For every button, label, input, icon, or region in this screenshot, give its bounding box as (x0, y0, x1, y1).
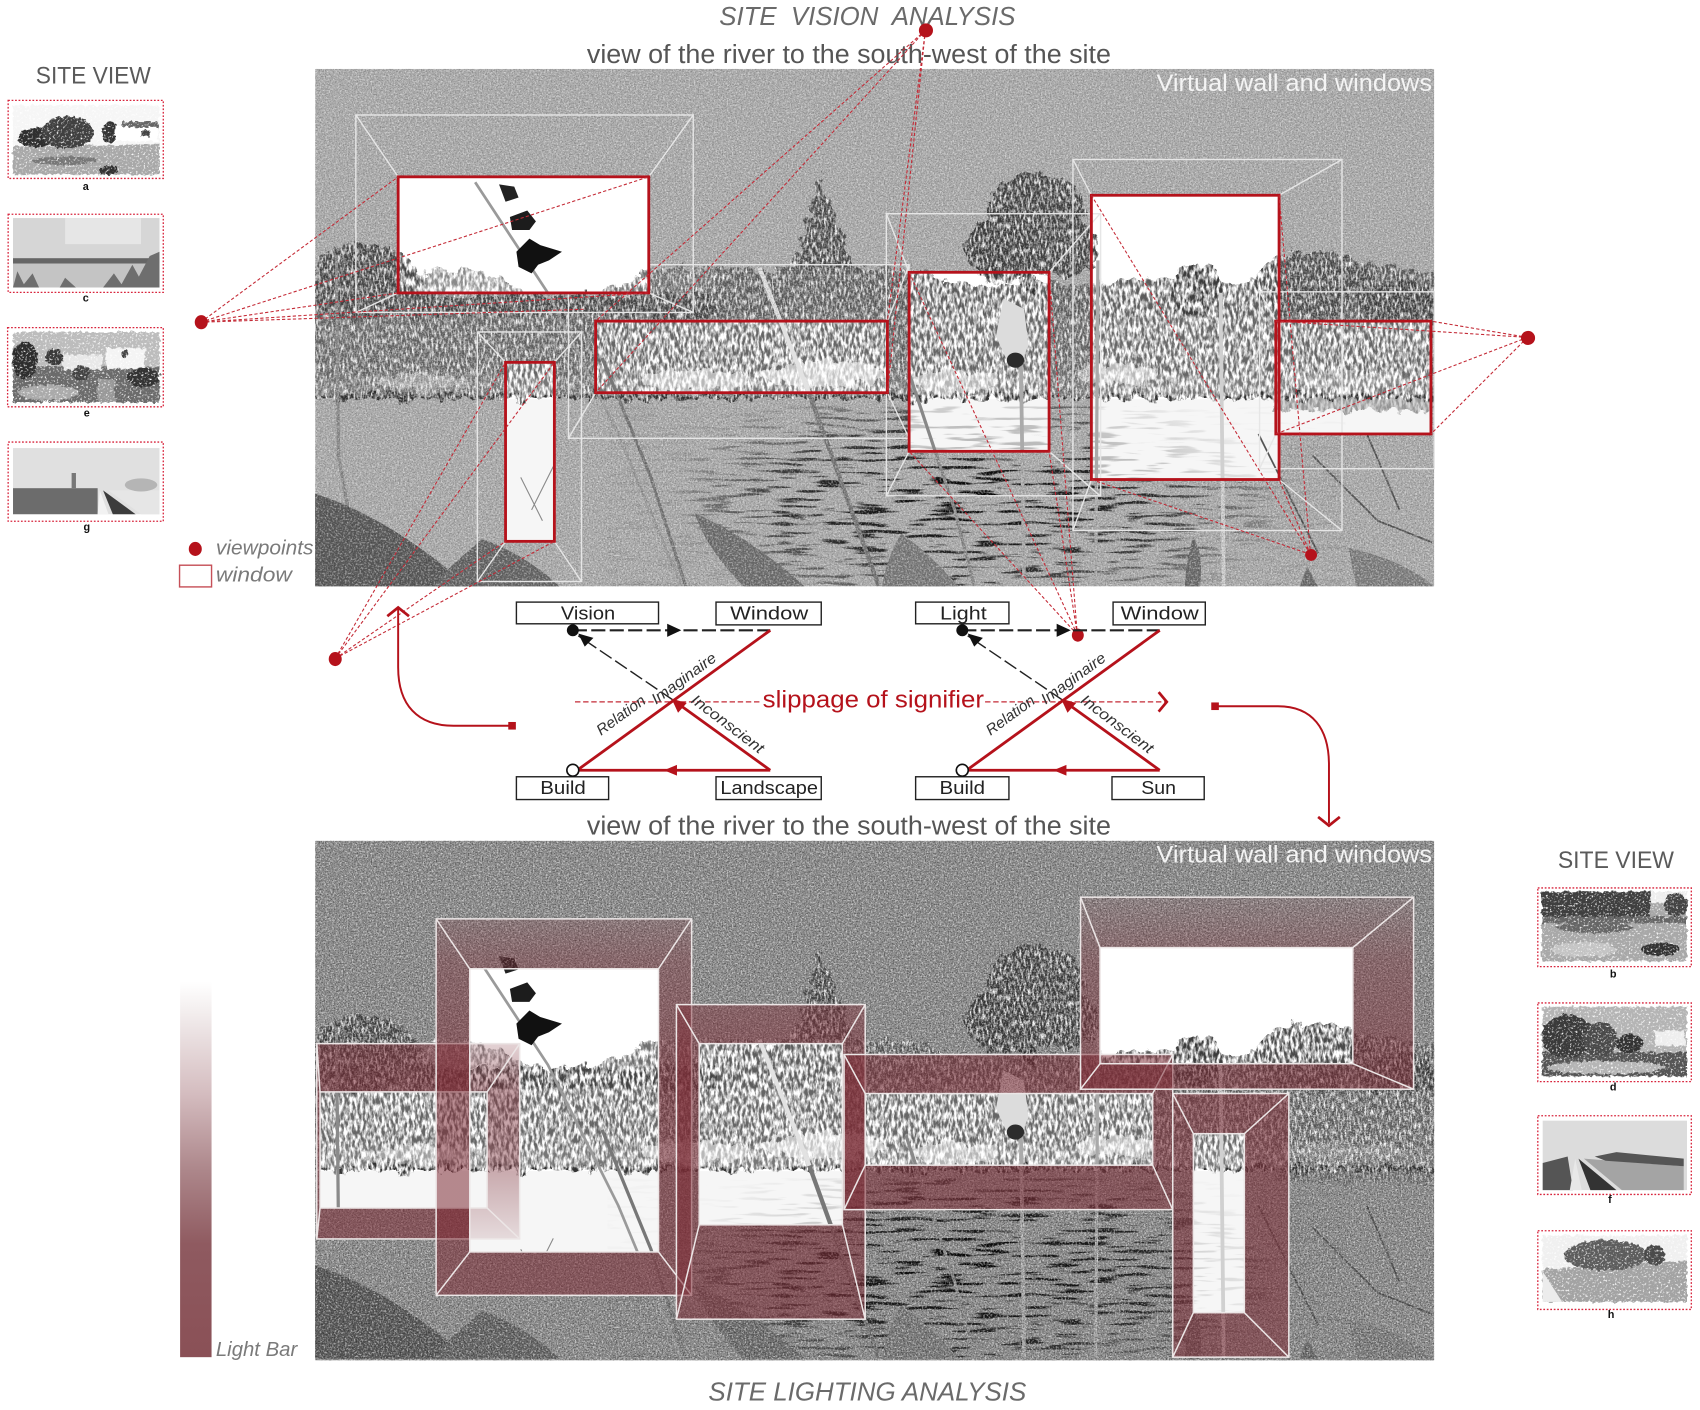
schema right: light window: Inconscient (1077, 691, 1157, 758)
schema left: vision window: Vision (561, 602, 615, 623)
lit frame: center window (676, 1005, 865, 1319)
schema left: vision window: Build (540, 777, 586, 798)
label: virtual wall and windows: Virtual wall and windows (1156, 841, 1432, 868)
schema right: light window: Relation (983, 692, 1038, 739)
subtitle: lower view caption: view of the river to the south-west of the site (587, 810, 1111, 840)
legend (180, 536, 314, 587)
viewpoint sight lines (201, 30, 1527, 659)
thumbnail c: c (83, 293, 89, 305)
light bar legend: Light Bar (216, 1338, 298, 1361)
thumbnail g (8, 442, 163, 533)
photo: river landscape darkened (311, 841, 1439, 1360)
subtitle: upper view caption: view of the river to the south-west of the site (587, 39, 1111, 69)
schema right: light window: Build (940, 777, 985, 798)
diagram: slippage of signifier schema (516, 602, 1205, 800)
heading: site view: SITE VIEW (1558, 847, 1674, 874)
heading: site view: SITE VIEW (36, 63, 151, 90)
schema left: vision window: Landscape (720, 777, 818, 798)
panel: site view left column (8, 63, 163, 533)
schema left: vision window: Imaginaire (648, 650, 720, 708)
arrow: diagram to upper photo (387, 608, 516, 730)
slippage line and label: slippage of signifier (763, 686, 984, 713)
panel: lower photo with lighting analysis (311, 840, 1439, 1360)
schema right: light window: Sun (1141, 777, 1176, 798)
schema left: vision window: Relation (593, 692, 649, 739)
thumbnail f: f (1608, 1194, 1612, 1206)
thumbnail d: d (1610, 1081, 1617, 1093)
panel: site view right column (1538, 847, 1691, 1321)
title: site vision analysis: SITE VISION ANALYSIS (719, 1, 1016, 31)
bright window views (320, 948, 1352, 1312)
legend: viewpoint marker: viewpoints (216, 536, 314, 559)
label: virtual wall and windows: Virtual wall and windows (1156, 70, 1432, 97)
schema right: light window (916, 602, 1205, 800)
bright window views (400, 178, 1430, 540)
legend: window marker: window (216, 563, 293, 586)
lit frame: narrow window (1173, 1094, 1289, 1357)
title: site lighting analysis: SITE LIGHTING ANALYSIS (708, 1377, 1027, 1407)
thumbnail b: b (1610, 968, 1617, 980)
thumbnail g: g (83, 521, 90, 533)
red windows (398, 177, 1431, 541)
thumbnail e: e (84, 408, 90, 420)
schema left: vision window (516, 602, 821, 800)
arrow: diagram to lower photo (1211, 702, 1340, 826)
thumbnail h (1538, 1231, 1691, 1321)
photo: river landscape (311, 69, 1439, 587)
thumbnail a: a (83, 181, 90, 193)
lit frame: horizontal window (844, 1054, 1173, 1210)
panel: upper photo with virtual walls and windows (311, 68, 1439, 587)
thumbnail h: h (1608, 1309, 1614, 1321)
thumbnail c (8, 214, 163, 305)
thumbnail e (8, 328, 163, 420)
thumbnail b (1538, 888, 1691, 980)
thumbnail f (1538, 1116, 1691, 1206)
viewpoint markers (195, 23, 1535, 666)
thumbnail d (1538, 1003, 1691, 1093)
schema right: light window: Window (1121, 602, 1200, 623)
white wall frames (356, 115, 1434, 581)
slippage line and label (575, 686, 1167, 713)
light bar legend (180, 982, 298, 1361)
schema right: light window: Light (940, 602, 987, 623)
wall frame behind windows (568, 265, 909, 438)
lit frame: left wide (317, 1044, 520, 1239)
thumbnail a (8, 100, 163, 193)
lit frame: upper right window (1081, 897, 1414, 1089)
schema left: vision window: Window (730, 602, 809, 623)
schema right: light window: Imaginaire (1038, 650, 1109, 708)
schema left: vision window: Inconscient (688, 691, 768, 758)
lit frame: tall window (436, 919, 692, 1295)
